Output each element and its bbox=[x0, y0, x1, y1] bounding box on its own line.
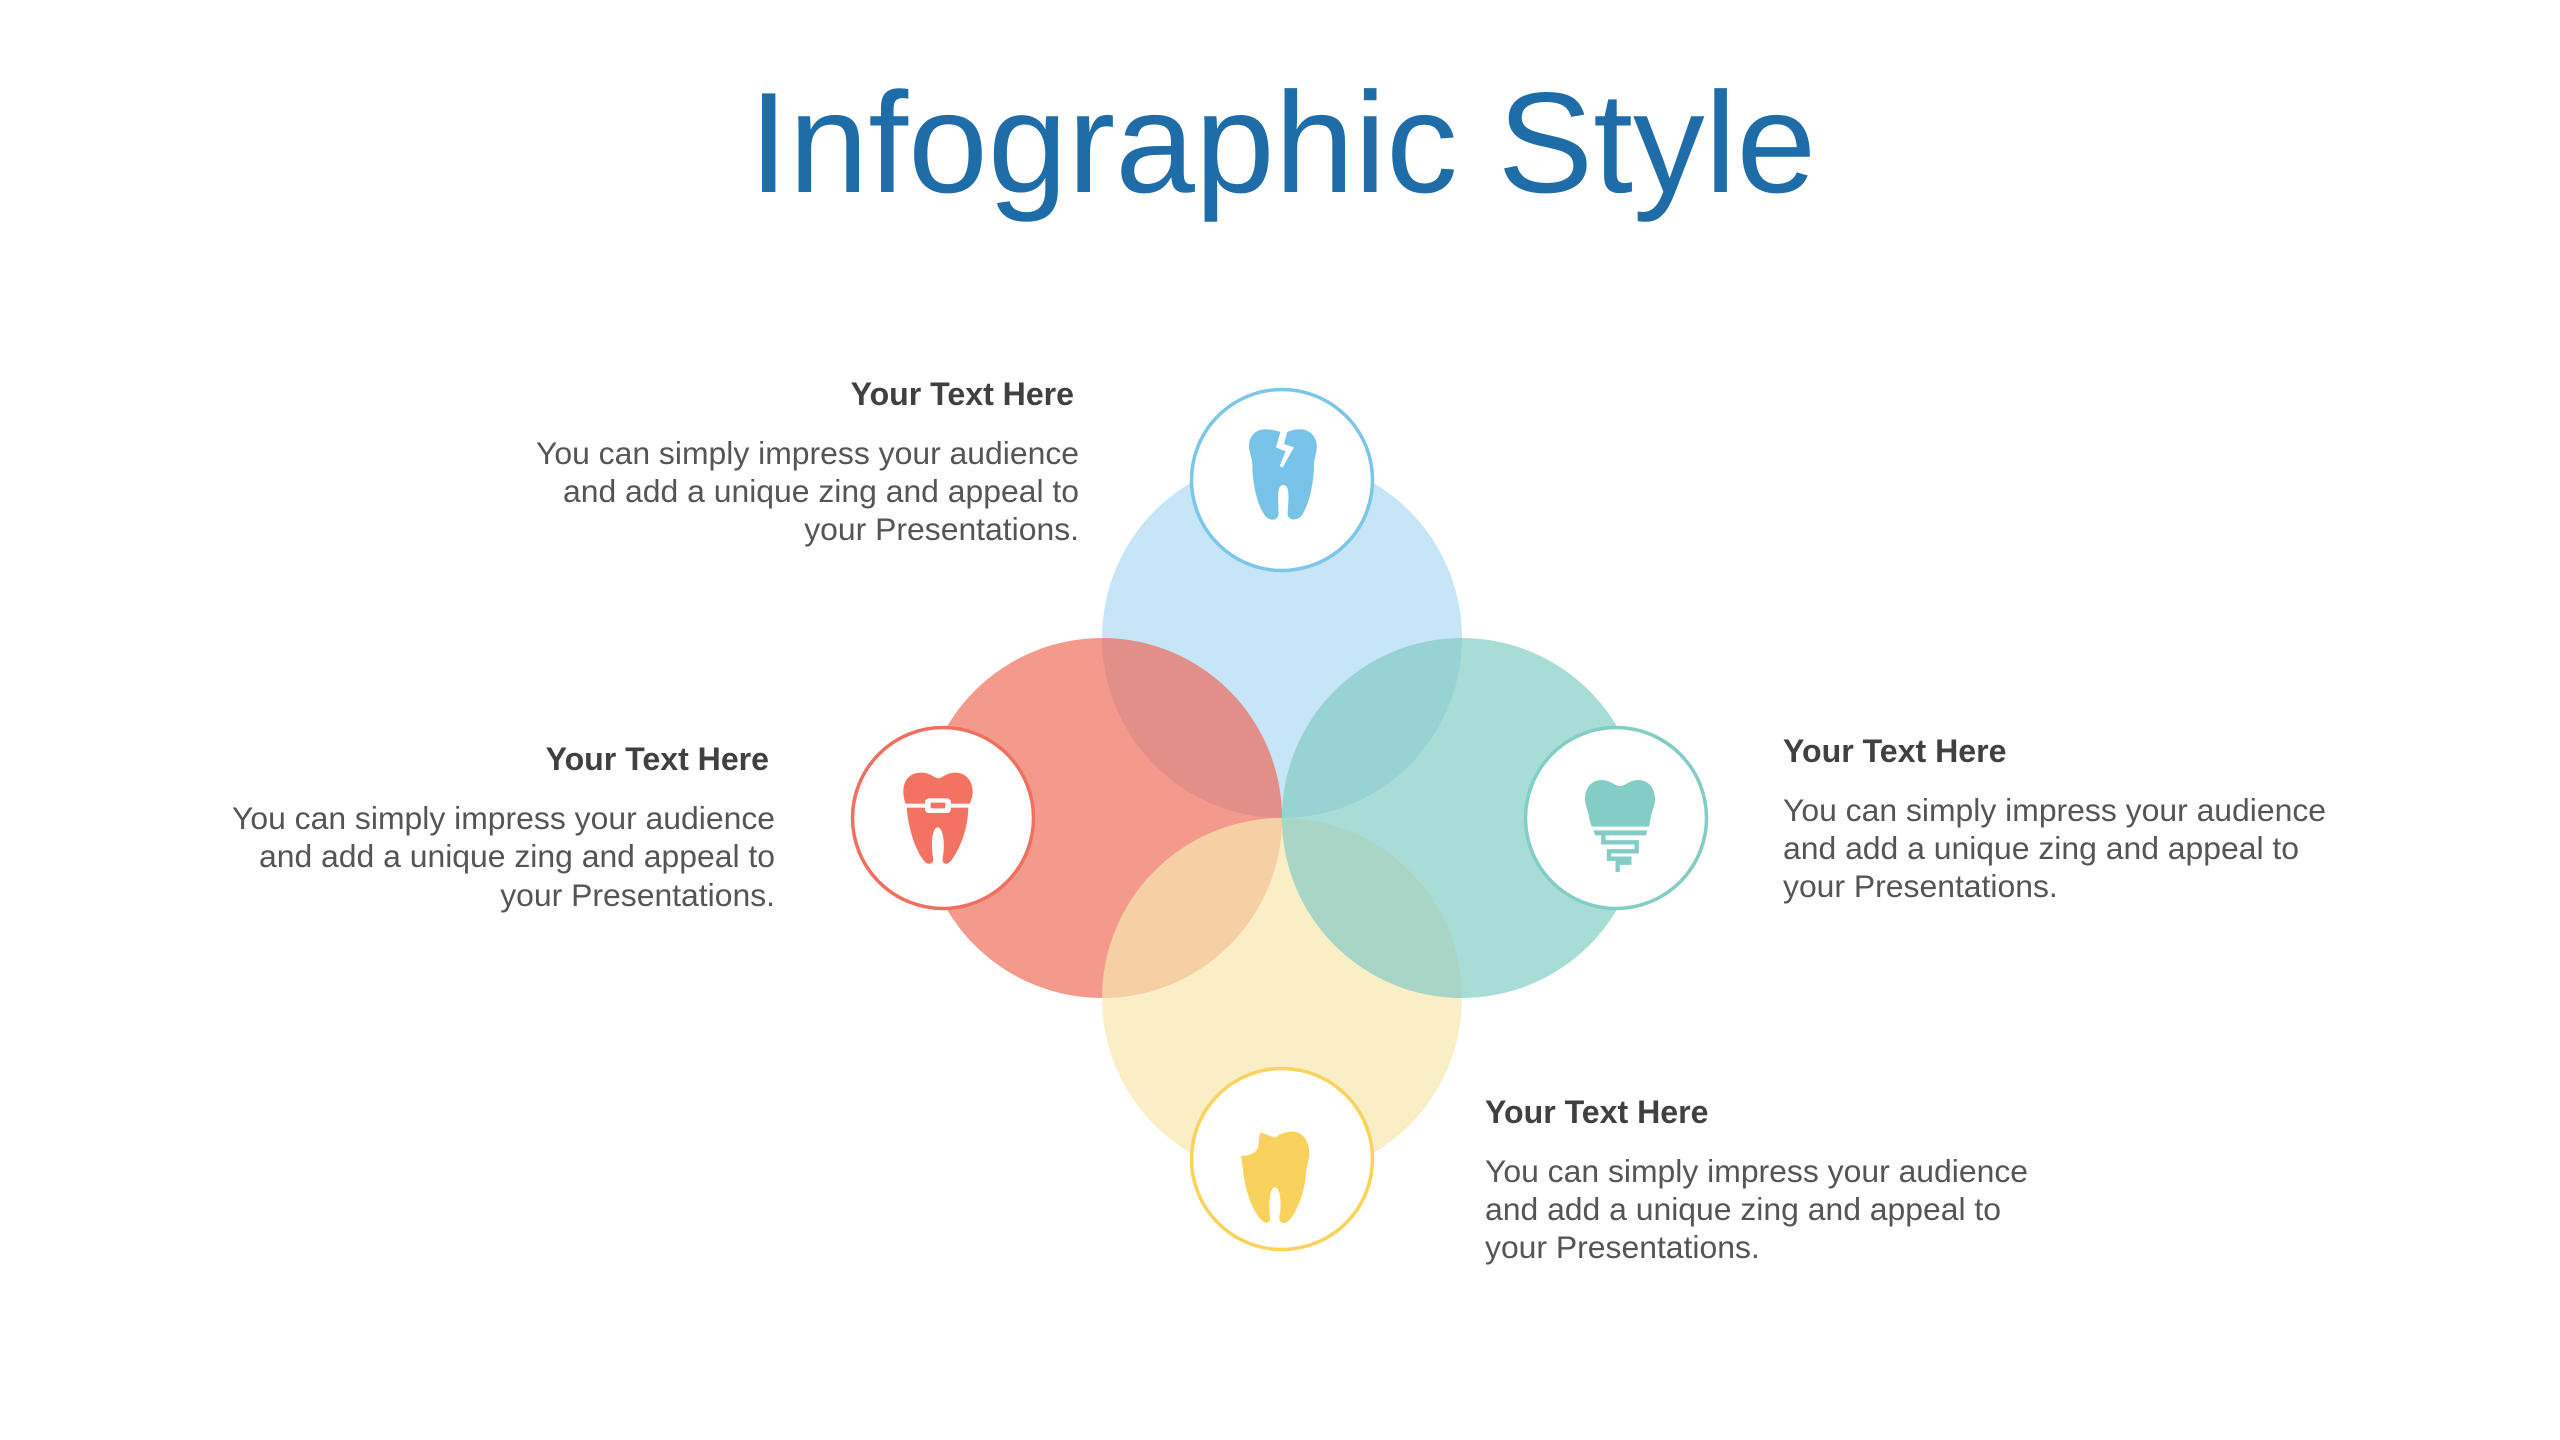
heading: Your Text Here bbox=[1783, 733, 2006, 769]
overlap: blue and red bbox=[1102, 638, 1282, 818]
badge: yellow bbox=[1192, 1068, 1372, 1250]
circle: red bbox=[922, 638, 1282, 998]
circle: yellow bbox=[1102, 818, 1462, 1178]
icon: tooth implant bbox=[1585, 780, 1655, 872]
icon: cracked tooth bbox=[1249, 429, 1317, 520]
body text: your Presentations. bbox=[804, 511, 1079, 547]
body text: You can simply impress your audience bbox=[232, 800, 775, 836]
body text: You can simply impress your audience bbox=[536, 435, 1079, 471]
body text: and add a unique zing and appeal to bbox=[259, 838, 775, 874]
icon: chipped tooth bbox=[1241, 1132, 1309, 1223]
panel: bottom item bbox=[1192, 1068, 2028, 1265]
heading: Your Text Here bbox=[546, 741, 769, 777]
panel: right item bbox=[1526, 728, 2326, 908]
body text: You can simply impress your audience bbox=[1485, 1153, 2028, 1189]
venn diagram bbox=[922, 458, 1642, 1178]
heading: Your Text Here bbox=[1485, 1094, 1708, 1130]
badge: red bbox=[852, 728, 1034, 908]
overlap: red and yellow bbox=[1102, 818, 1282, 998]
body text: and add a unique zing and appeal to bbox=[563, 473, 1079, 509]
body text: You can simply impress your audience bbox=[1783, 792, 2326, 828]
overlap: blue and teal bbox=[1282, 638, 1462, 818]
badge: teal bbox=[1526, 728, 1706, 908]
body text: your Presentations. bbox=[1485, 1229, 1760, 1265]
body text: and add a unique zing and appeal to bbox=[1783, 830, 2299, 866]
body text: your Presentations. bbox=[500, 877, 775, 913]
badge: blue bbox=[1192, 390, 1372, 570]
title: Infographic Style bbox=[749, 63, 1816, 223]
body text: and add a unique zing and appeal to bbox=[1485, 1191, 2001, 1227]
heading: Your Text Here bbox=[851, 376, 1074, 412]
circle: teal bbox=[1282, 638, 1642, 998]
icon: tooth with braces bbox=[902, 773, 974, 864]
panel: left item bbox=[232, 728, 1034, 913]
body text: your Presentations. bbox=[1783, 868, 2058, 904]
panel: top item bbox=[536, 376, 1372, 570]
circle: blue bbox=[1102, 458, 1462, 818]
overlap: teal and yellow bbox=[1282, 818, 1462, 998]
